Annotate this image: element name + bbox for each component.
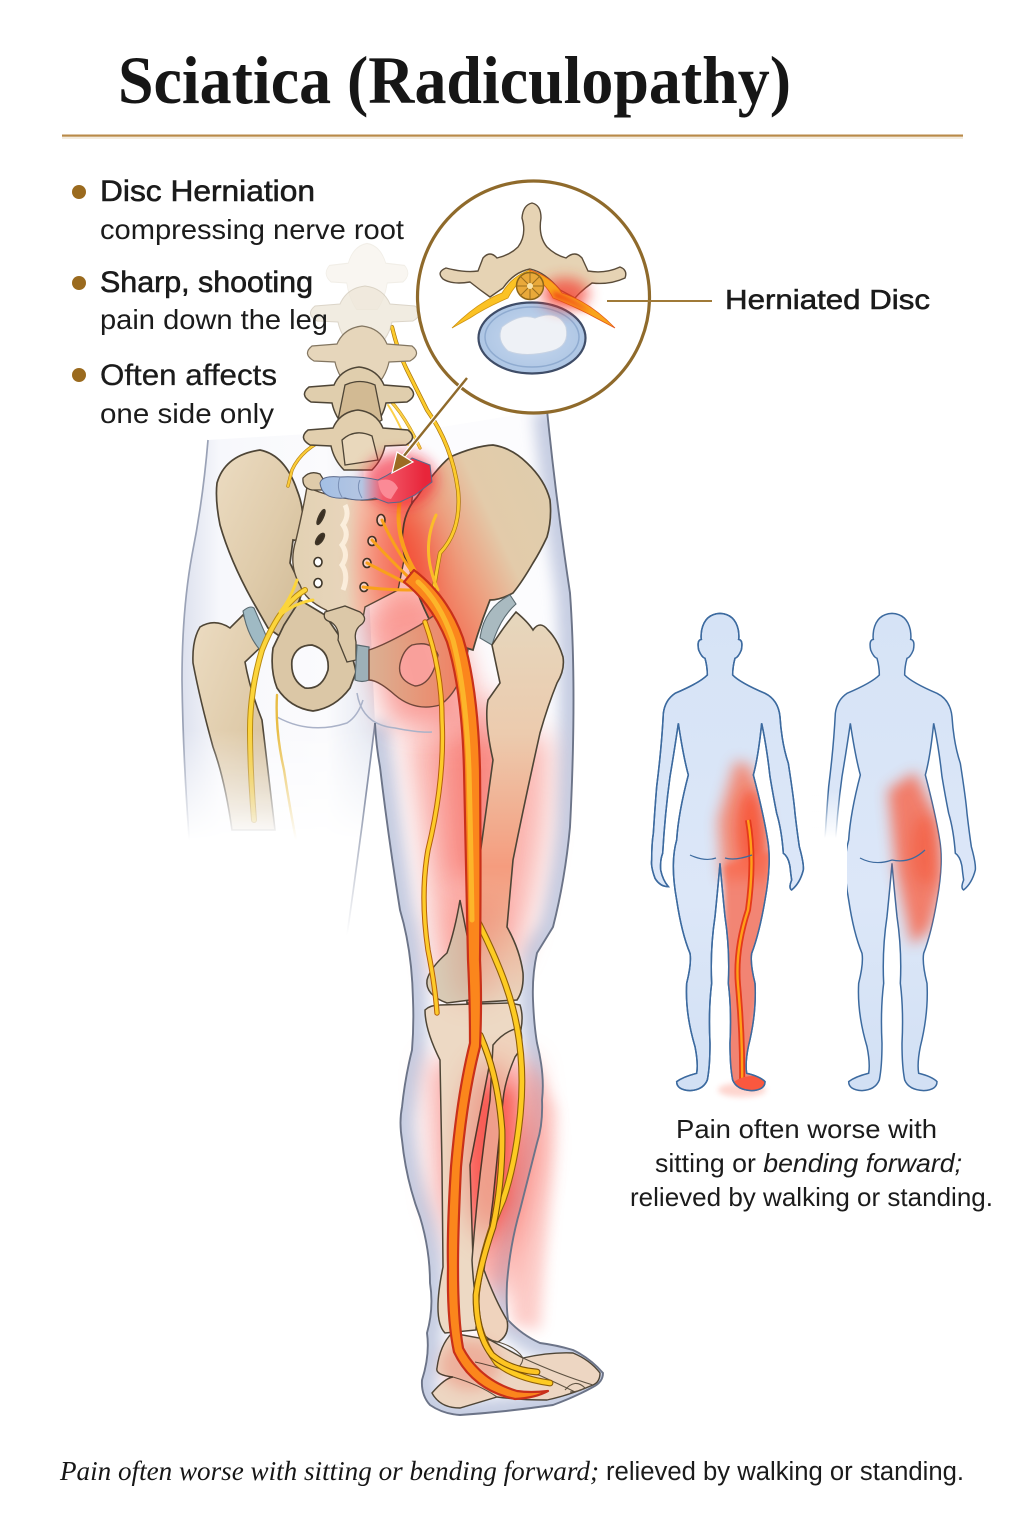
anatomy illustration: posterior view of pelvis and leg <box>182 243 603 1415</box>
side caption: sitting or bending forward; <box>655 1148 962 1178</box>
nerve root right inflamed <box>530 270 615 328</box>
disc <box>478 302 586 374</box>
bullet: sharp pain: Sharp, shooting <box>100 266 313 299</box>
sciatic nerve branches: yellow <box>250 327 550 1383</box>
main sciatic nerve trunk <box>404 570 548 1399</box>
right hip joint cartilage <box>480 595 516 645</box>
arrow from inset to lesion <box>392 378 467 473</box>
bullet: disc herniation: Disc Herniation <box>100 175 315 208</box>
bullet: disc herniation <box>72 175 404 245</box>
red herniation glow <box>541 278 589 310</box>
bullet: one side <box>72 359 277 429</box>
lumbar vertebrae stack <box>303 243 420 490</box>
pain area on hip and thigh <box>888 772 944 945</box>
bullet: sharp pain <box>72 266 328 335</box>
left side of body, fading out <box>182 430 375 935</box>
right pubis ring <box>369 610 468 707</box>
vertebra cross-section <box>440 203 626 298</box>
sciatic nerve roots fan <box>363 485 438 590</box>
pubic symphysis <box>355 645 369 682</box>
buttock crease <box>690 855 752 859</box>
bottom caption <box>59 1455 964 1486</box>
right femur <box>465 612 563 1003</box>
spinal cord <box>516 272 544 300</box>
left leg nerves, fading <box>250 580 313 850</box>
inset circle frame <box>418 181 650 413</box>
sacral median crest <box>342 505 347 590</box>
thin glow over the bones <box>366 504 520 1390</box>
sacrum <box>293 487 413 622</box>
figure: full-body pain, right <box>812 613 975 1091</box>
medial femoral condyle <box>427 900 470 1003</box>
side caption: Pain often worse with <box>676 1114 937 1144</box>
coccyx <box>324 606 365 662</box>
side caption: relieved by walking or standing. <box>630 1182 993 1212</box>
white fade over left forearm <box>812 790 847 910</box>
foot glow <box>718 1083 766 1097</box>
herniated disc with red glow <box>320 453 436 507</box>
bullet: one side: one side only <box>100 398 274 429</box>
buttock crease <box>860 850 925 863</box>
bullet: sharp pain: pain down the leg <box>100 304 328 335</box>
left hip joint cartilage <box>243 607 268 650</box>
tibia <box>425 1003 522 1333</box>
buttock crease lines <box>277 693 432 732</box>
callout: herniated disc: Herniated Disc <box>725 284 930 315</box>
title: Sciatica (Radiculopathy) <box>118 42 791 118</box>
title rule <box>62 134 963 138</box>
figure outline <box>651 613 803 1091</box>
figure: full-body pain, left <box>651 613 803 1110</box>
left pubis and ischium ring <box>272 600 356 711</box>
left ilium <box>216 450 303 640</box>
bullet list <box>72 175 404 429</box>
inflamed root core <box>552 291 590 312</box>
nerve root left <box>452 270 530 328</box>
pain glow under the bones <box>360 590 556 1330</box>
bottom caption: Pain often worse with sitting or bending forward; <box>59 1455 599 1486</box>
bullet: disc herniation: compressing nerve root <box>100 214 404 245</box>
bullet: one side: Often affects <box>100 359 277 392</box>
tibial branch outer <box>476 920 550 1383</box>
inset: herniated disc cross-section <box>418 181 650 413</box>
right side of body and leg silhouette <box>362 410 603 1415</box>
body outline, right leg <box>375 410 603 1415</box>
foot bones <box>432 1333 600 1408</box>
pain area with nerve <box>718 762 772 1110</box>
left femur <box>193 615 275 830</box>
lateral lumbar nerve loop <box>288 327 459 593</box>
right ilium <box>402 445 551 650</box>
tibial branch inner <box>476 1035 537 1372</box>
sacral foramina <box>314 509 385 592</box>
bottom caption: relieved by walking or standing. <box>606 1458 964 1486</box>
common peroneal branch <box>424 622 442 1013</box>
fibula <box>472 1028 522 1342</box>
side caption <box>630 1114 993 1212</box>
